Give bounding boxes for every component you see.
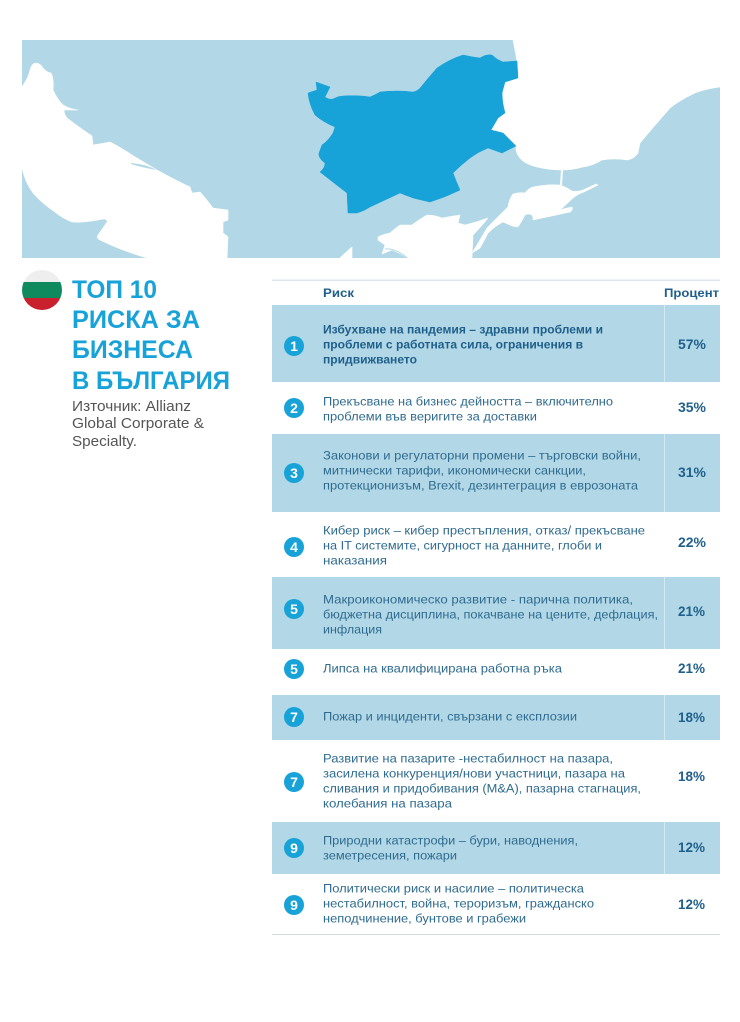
row 7: 18% <box>678 710 705 725</box>
source note: Specialty. <box>72 434 137 450</box>
row 5: инфлация <box>323 622 382 636</box>
shoreline detail <box>385 249 407 258</box>
row 5: 21% <box>678 604 705 619</box>
row 8 <box>284 752 705 810</box>
row 3: митнически тарифи, икономически санкции, <box>323 464 586 478</box>
row 8: колебания на пазара <box>323 796 452 810</box>
row 5: бюджетна дисциплина, покачване на цените, дефлация, <box>323 608 658 622</box>
row 9 <box>272 822 720 874</box>
icon: Bulgarian flag <box>22 270 62 310</box>
title: ТОП 10 <box>72 276 157 304</box>
row 8: сливания и придобивания (M&A), пазарна стагнация, <box>323 782 641 796</box>
row 10: Политически риск и насилие – политическа <box>323 882 584 896</box>
column heading: risk: Риск <box>323 286 355 300</box>
land: small coast piece <box>340 247 352 258</box>
row 3: Законови и регулаторни промени – търговски войни, <box>323 448 641 462</box>
row 3: 3 <box>290 465 298 481</box>
row 8: Развитие на пазарите -нестабилност на пазара, <box>323 752 613 766</box>
row 6: 21% <box>678 661 705 676</box>
title: БИЗНЕСА <box>72 336 193 364</box>
row 1: придвижването <box>323 352 417 366</box>
row 7: 7 <box>290 709 298 725</box>
land: Bosphorus strait <box>560 170 563 185</box>
row 8: 7 <box>290 774 298 790</box>
row 3: 31% <box>678 465 706 480</box>
row 6 <box>284 659 705 679</box>
row 1: Избухване на пандемия – здравни проблеми и <box>323 322 603 336</box>
row 10: 9 <box>290 897 298 913</box>
row 2 <box>284 394 706 424</box>
row 4: Кибер риск – кибер престъпления, отказ/ прекъсване <box>323 524 645 538</box>
row 5 <box>272 577 720 649</box>
title <box>72 276 230 395</box>
row 2: проблеми във веригите за доставки <box>323 410 537 424</box>
row 1 <box>272 305 720 382</box>
row 1: 57% <box>678 337 706 352</box>
row 10: неподчинение, бунтове и грабежи <box>323 912 526 926</box>
row 5: Макроикономическо развитие - парична политика, <box>323 592 633 606</box>
row 2: 35% <box>678 400 706 415</box>
row 4: 4 <box>290 539 298 555</box>
row 1: проблеми с работната сила, ограничения в <box>323 338 583 352</box>
row 8: 18% <box>678 769 705 784</box>
row 5: 5 <box>290 601 298 617</box>
title: РИСКА ЗА <box>72 306 200 334</box>
column heading: percent: Процент <box>664 286 719 300</box>
row 2: 2 <box>290 400 298 416</box>
river detail <box>131 163 157 170</box>
source note: Източник: Allianz <box>72 399 191 415</box>
land: Sea of Marmara shore <box>472 184 598 253</box>
row 9: 12% <box>678 840 705 855</box>
row 7 <box>272 695 720 740</box>
land: western white area <box>22 63 228 258</box>
row 9: 9 <box>290 840 298 856</box>
title: В БЪЛГАРИЯ <box>72 367 230 395</box>
row 6: 5 <box>290 661 298 677</box>
row 4: 22% <box>678 535 706 550</box>
row 6: Липса на квалифицирана работна ръка <box>323 662 562 676</box>
panel: risk table <box>272 280 720 935</box>
row 3: протекционизъм, Brexit, дезинтеграция в еврозоната <box>323 478 638 492</box>
row 9: Природни катастрофи – бури, наводнения, <box>323 834 578 848</box>
land: Black Sea <box>491 40 720 170</box>
row 4 <box>284 524 706 568</box>
row 3 <box>272 434 720 512</box>
land: Aegean coast <box>378 215 488 258</box>
row 9: земетресения, пожари <box>323 848 457 862</box>
row 4: на IT системите, сигурност на данните, глоби и <box>323 538 602 552</box>
map of Bulgaria and region <box>22 40 720 258</box>
row 10: 12% <box>678 897 705 912</box>
row 8: засилена конкуренция/нови участници, пазара на <box>323 766 625 780</box>
source note <box>72 399 204 450</box>
row 10 <box>284 882 705 926</box>
row 2: Прекъсване на бизнес дейността – включително <box>323 394 613 408</box>
row 10: нестабилност, война, тероризъм, гражданско <box>323 896 594 910</box>
row 1: 1 <box>290 338 298 354</box>
row 4: наказания <box>323 554 387 568</box>
Bulgaria <box>308 55 518 213</box>
source note: Global Corporate & <box>72 416 204 432</box>
row 7: Пожар и инциденти, свързани с експлозии <box>323 710 577 724</box>
